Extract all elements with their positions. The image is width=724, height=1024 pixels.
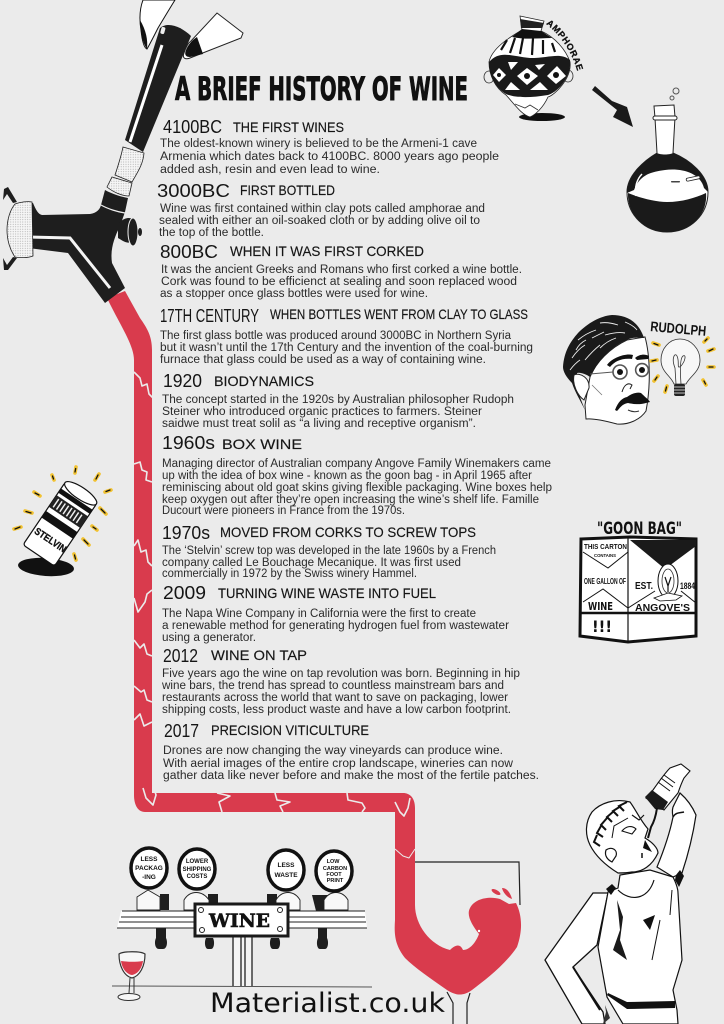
- light rays: [651, 338, 714, 392]
- timeline entry: 3000BC: FIRST BOTTLED: [240, 182, 335, 198]
- timeline entry: 3000BC: sealed with either an oil-soaked cloth or by adding olive oil to: [159, 215, 480, 227]
- goon bag label: "GOON BAG": [597, 519, 682, 539]
- icon: amphora: [484, 16, 584, 121]
- timeline entry: 2009: 2009: [163, 583, 206, 603]
- rail: [117, 911, 367, 928]
- timeline entry: 2012: [161, 646, 520, 716]
- timeline entry: 2017: PRECISION VITICULTURE: [211, 722, 369, 738]
- timeline entry: 2012: restaurants across the world that want to save on packaging, lower: [162, 692, 508, 704]
- tap head: less waste: LESS: [278, 862, 295, 869]
- timeline entry: 2017: Drones are now changing the way vineyards can produce wine.: [163, 745, 503, 757]
- timeline entry: 1960s: Ducourt were pioneers in France from the 1970s.: [162, 505, 405, 517]
- timeline entry: 1920: Steiner who introduced organic practices to farmers. Steiner: [162, 406, 482, 418]
- tap collar and body: [28, 190, 128, 303]
- icon: Rudolph Steiner portrait: [563, 315, 714, 424]
- ear: [574, 374, 589, 400]
- icon: Angove's wine box: ONE GALLON OF: [584, 577, 626, 586]
- wine glass outline: [415, 862, 520, 1024]
- spectacles: [613, 365, 627, 379]
- credit: Materialist.co.uk: Materialist.co.uk: [210, 988, 445, 1019]
- tap head: less packaging: PACKAG: [135, 865, 163, 872]
- timeline entry: 800BC: It was the ancient Greeks and Romans who first corked a wine bottle.: [161, 264, 522, 276]
- belt: [607, 993, 675, 1009]
- tap head: low carbon footprint: FOOT: [326, 872, 342, 878]
- timeline entry: 1970s: MOVED FROM CORKS TO SCREW TOPS: [220, 524, 476, 540]
- timeline entry: 1960s: keep oxygen out after they’re open increasing the wine’s shelf life. Famille: [162, 494, 539, 506]
- name label: RUDOLPH: [650, 318, 707, 339]
- timeline entry: 1970s: The ‘Stelvin’ screw top was developed in the late 1960s by a French: [162, 545, 496, 557]
- timeline entry: 800BC: 800BC: [160, 242, 218, 262]
- timeline entry: 2009: The Napa Wine Company in California were the first to create: [162, 608, 476, 620]
- timeline entry: 4100BC: [160, 117, 499, 176]
- tap head: less packaging: -ING: [142, 874, 156, 881]
- amphora label: AMPHORAE: [546, 20, 584, 71]
- icon: Angove's wine box: WINE: [588, 600, 613, 613]
- fingers: [140, 0, 175, 49]
- timeline entry: 1920: The concept started in the 1920s by Australian philosopher Rudoph: [162, 394, 514, 406]
- timeline entry: 2012: wine bars, the trend has spread to countless mainstream bars and: [161, 680, 504, 692]
- timeline entry: 1960s: [162, 433, 552, 517]
- timeline entry: 1920: BIODYNAMICS: [214, 373, 314, 389]
- tap head: low carbon footprint: [316, 851, 352, 891]
- timeline entry: 800BC: WHEN IT WAS FIRST CORKED: [230, 243, 424, 259]
- title: A BRIEF HISTORY OF WINE: [175, 70, 468, 108]
- dotted ferrule: [107, 147, 144, 196]
- timeline entry: 1970s: 1970s: [162, 523, 210, 543]
- light bulb: [661, 339, 700, 384]
- icon: Roman figure drinking wine: [545, 764, 696, 1024]
- tap head: less waste: [268, 850, 304, 890]
- timeline entry: 2017: With aerial images of the entire crop landscape, wineries can now: [163, 758, 514, 770]
- timeline entry: 4100BC: added ash, resin and even lead to wine.: [160, 164, 380, 176]
- shine rays: [14, 467, 111, 560]
- eyebrows: [607, 355, 649, 367]
- timeline entry: 17th century: furnace that glass could be used as a way of containing wine.: [160, 354, 486, 366]
- timeline entry: 2009: a renewable method for generating hydrogen fuel from wastewater: [162, 620, 509, 632]
- timeline entry: 2012: 2012: [163, 646, 198, 666]
- timeline entry: 17th century: The first glass bottle was produced around 3000BC in Northern Syria: [160, 330, 512, 342]
- box text: THIS CARTON: [584, 542, 627, 551]
- timeline entry: 3000BC: the top of the bottle.: [159, 227, 264, 239]
- timeline entry: 3000BC: 3000BC: [157, 181, 230, 201]
- icon: Angove's wine box: CONTAINS: [594, 553, 616, 558]
- timeline entry: 2012: Five years ago the wine on tap revolution was born. Beginning in hip: [162, 668, 520, 680]
- timeline entry: 4100BC: The oldest-known winery is believed to be the Armeni-1 cave: [160, 138, 477, 150]
- timeline entry: 800BC: as a stopper once glass bottles were used for wine.: [160, 288, 428, 300]
- timeline entry: 2012: shipping costs, less product waste and have a low carbon footprint.: [162, 704, 511, 716]
- wine stream from tap into glass: [107, 291, 521, 995]
- head: [586, 801, 658, 873]
- tap head: lower shipping costs: SHIPPING: [183, 867, 212, 873]
- timeline entry: 17th century: 17TH CENTURY: [160, 306, 259, 326]
- timeline entry: 17th century: WHEN BOTTLES WENT FROM CLAY TO GLASS: [270, 306, 528, 322]
- icon: Angove's wine box: !!!: [592, 617, 612, 636]
- timeline entry: 17th century: [160, 306, 533, 366]
- timeline entry: 2009: using a generator.: [162, 632, 256, 644]
- WINE sign: [195, 904, 288, 936]
- timeline entry: 1920: saidwe must treat solil as “a living and receptive organism”.: [162, 418, 476, 430]
- tap handle: [125, 25, 191, 152]
- timeline entry: 1960s: reminiscing about old goat skins giving flexible packaging. Wine boxes help: [162, 482, 552, 494]
- timeline entry: 800BC: [160, 242, 522, 300]
- bar wine taps: [112, 848, 372, 987]
- black tap parts: [155, 894, 330, 949]
- bottle in hand: [646, 764, 690, 810]
- tap head: less waste: WASTE: [274, 872, 298, 879]
- laurel wreath: [594, 802, 627, 846]
- timeline entry: 1970s: company called Le Bouchage Mecanique. It was first used: [162, 557, 461, 569]
- tap head: less packaging: LESS: [141, 856, 158, 863]
- tap head: low carbon footprint: CARBON: [323, 866, 347, 872]
- tunic: [598, 870, 682, 1024]
- beer-style wine tap: [3, 0, 243, 303]
- timeline entry: 800BC: Cork was found to be efficienct at sealing and soon replaced wood: [161, 276, 517, 288]
- timeline entry: 2009: TURNING WINE WASTE INTO FUEL: [218, 585, 436, 601]
- timeline entry: 1970s: commercially in 1972 by the Swiss winery Hammel.: [162, 568, 417, 580]
- moustache: [615, 393, 650, 411]
- timeline entry: 1960s: up with the idea of box wine - known as the goon bag - in April 1965 after: [162, 470, 532, 482]
- icon: Stelvin screw-top bottle: [14, 467, 111, 578]
- arrow from amphora to bottle: [592, 86, 633, 127]
- timeline entry: 3000BC: [157, 181, 485, 239]
- crest: [658, 564, 678, 598]
- tap head: lower shipping costs: COSTS: [187, 874, 207, 880]
- timeline entry: 2009: [162, 583, 509, 644]
- timeline entry: 2017: 2017: [164, 721, 199, 741]
- timeline entry: 1960s: Managing director of Australian company Angove Family Winemakers came: [162, 458, 551, 470]
- side knob: [118, 218, 134, 243]
- timeline entry: 4100BC: THE FIRST WINES: [233, 119, 344, 135]
- tap head: less packaging: [131, 848, 167, 888]
- tap head: lower shipping costs: LOWER: [186, 859, 209, 865]
- face: [585, 337, 649, 424]
- timeline entry: 4100BC: Armenia which dates back to 4100BC. 8000 years ago people: [160, 151, 499, 163]
- pouring wine: [648, 808, 657, 838]
- icon: Angove's wine box: 1884: [680, 581, 695, 591]
- icon: Angove's wine box: ANGOVE'S: [635, 602, 690, 614]
- icon: glass flask: [627, 88, 708, 232]
- left arm on hip: [545, 893, 608, 1024]
- face details: [612, 818, 628, 838]
- timeline entry: 1920: 1920: [163, 371, 202, 391]
- timeline entry: 1920: [162, 371, 514, 430]
- dotted end cap: [7, 202, 33, 258]
- timeline entry: 3000BC: Wine was first contained within clay pots called amphorae and: [160, 203, 485, 215]
- timeline entry: 4100BC: 4100BC: [163, 117, 222, 137]
- tap head: low carbon footprint: PRINT: [327, 878, 344, 884]
- dome bases: [137, 890, 348, 910]
- post: [234, 937, 252, 986]
- timeline entry: 1960s: 1960s: [162, 433, 215, 453]
- timeline entry: 2017: gather data like never before and make the most of the fertile patches.: [163, 770, 539, 782]
- tap head: lower shipping costs: [179, 849, 215, 889]
- hair: [563, 315, 644, 410]
- icon: Angove's wine box: [580, 537, 696, 642]
- tap head: low carbon footprint: LOW: [327, 859, 340, 865]
- raised arm: [657, 793, 696, 877]
- icon: Angove's wine box: EST.: [635, 581, 653, 592]
- timeline entry: 1960s: BOX WINE: [222, 436, 302, 452]
- bottle label text: STELVIN: [32, 526, 68, 555]
- timeline entry: 17th century: but it wasn’t until the 17th Century and the invention of the coal-burning: [160, 342, 533, 354]
- floor line: [112, 986, 372, 987]
- timeline entry: 2017: [163, 721, 539, 782]
- timeline entry: 1970s: [162, 523, 496, 580]
- wine splash: [478, 888, 512, 932]
- small wine glass: [118, 952, 145, 1000]
- bar wine taps: WINE: [208, 910, 270, 932]
- timeline entry: 2012: WINE ON TAP: [211, 647, 307, 663]
